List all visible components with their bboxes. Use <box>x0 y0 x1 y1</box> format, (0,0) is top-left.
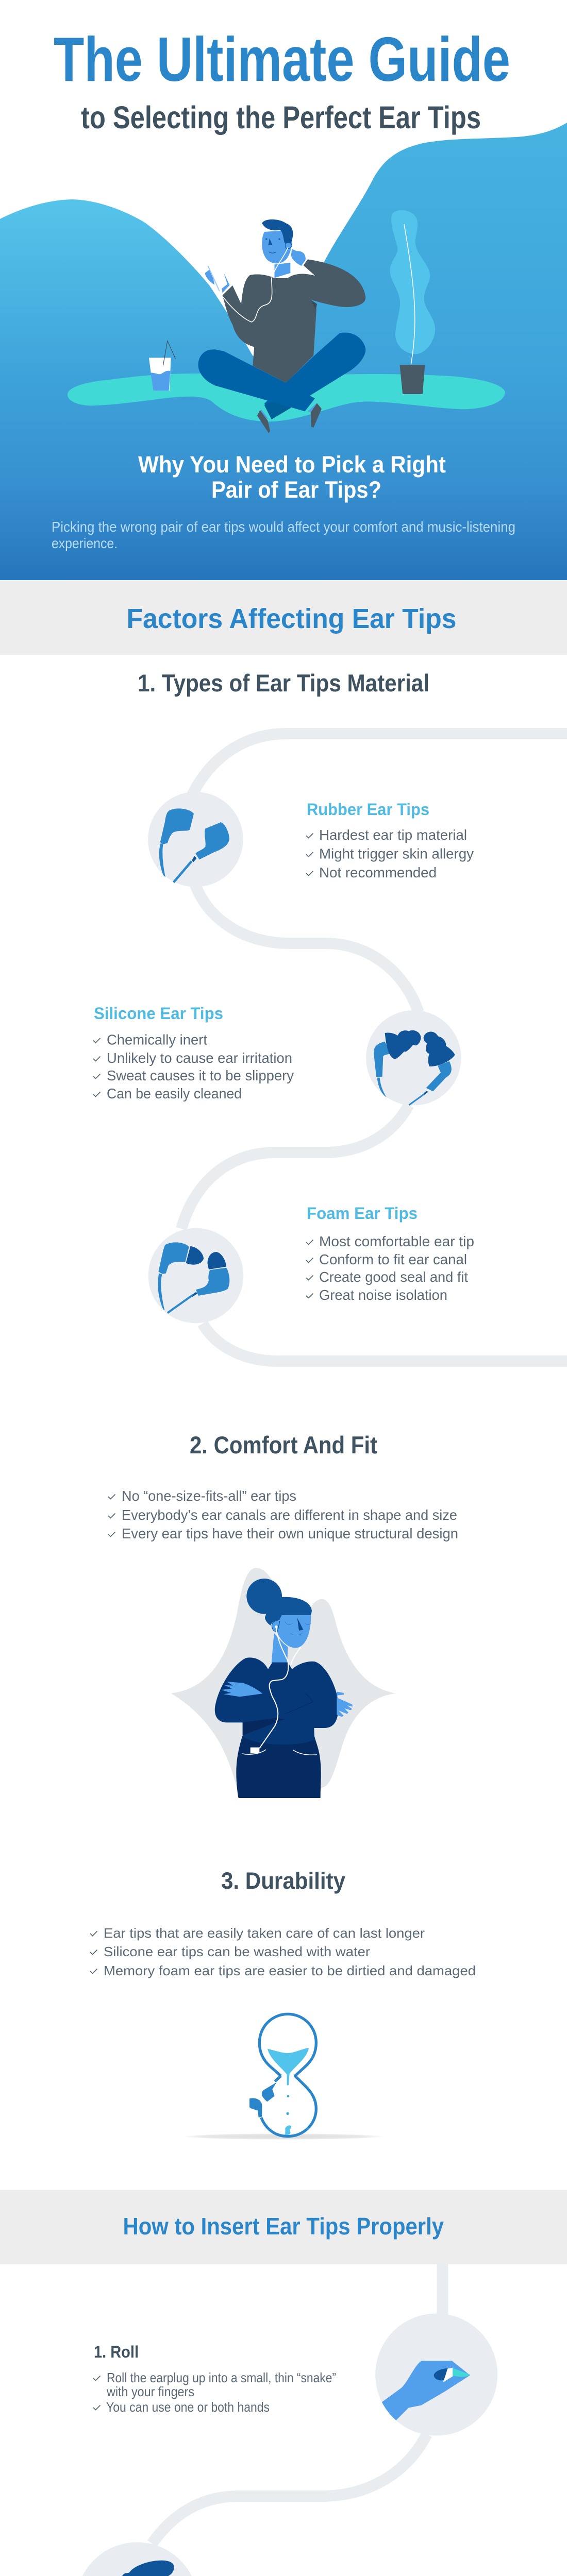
man: earphone cable <box>223 247 288 322</box>
ground blob <box>68 374 505 421</box>
list: comfort: No “one-size-fits-all” ear tips <box>122 1488 296 1504</box>
subtitle: to Selecting the Perfect Ear Tips <box>81 100 481 135</box>
heading: why pick: Why You Need to Pick a Right <box>138 451 446 478</box>
list: silicone <box>93 1031 294 1101</box>
heading: durability: 3. Durability <box>221 1868 345 1894</box>
man: sweater <box>222 259 365 383</box>
hourglass shadow <box>182 2133 384 2140</box>
man: head <box>262 219 293 278</box>
list: durability: Ear tips that are easily taken care of can last longer <box>104 1925 425 1941</box>
intro paragraph: experience. <box>52 535 118 551</box>
panel: foam ear tips <box>148 1204 474 1323</box>
list: roll: with your fingers <box>106 2384 194 2399</box>
path: material rail <box>181 734 567 1361</box>
heading: why pick <box>138 451 446 503</box>
panel: rubber ear tips <box>148 792 474 887</box>
list: comfort <box>108 1488 458 1541</box>
woman: earphone cable and player <box>242 1627 317 1755</box>
heading: types of material: 1. Types of Ear Tips Material <box>138 669 429 697</box>
woman: facial features <box>285 1618 311 1635</box>
list: silicone: Can be easily cleaned <box>107 1086 242 1101</box>
woman: hair <box>246 1579 312 1625</box>
earbud ends <box>262 2082 277 2102</box>
list: durability: Silicone ear tips can be washed with water <box>104 1944 370 1959</box>
woman: neck <box>272 1633 288 1663</box>
woman: left hand <box>222 1682 262 1697</box>
heading: how to insert: How to Insert Ear Tips Properly <box>123 2213 444 2240</box>
woman: trousers <box>236 1736 321 1798</box>
list: roll: Roll the earplug up into a small, thin “snake” <box>107 2370 336 2385</box>
icon: plant leaf <box>390 210 435 354</box>
intro paragraph <box>52 519 515 551</box>
heading: why pick: Pair of Ear Tips? <box>211 477 381 503</box>
list: roll <box>93 2370 336 2415</box>
list: comfort: Everybody’s ear canals are different in shape and size <box>122 1507 457 1523</box>
list: comfort: Every ear tips have their own unique structural design <box>122 1526 458 1541</box>
right hill background <box>258 123 567 580</box>
heading: comfort and fit: 2. Comfort And Fit <box>190 1431 377 1459</box>
plant stem <box>404 224 415 364</box>
woman: face <box>277 1615 311 1648</box>
icon: drink glass <box>149 341 176 391</box>
list: rubber <box>306 827 474 880</box>
list: foam <box>306 1233 474 1303</box>
list: silicone: Unlikely to cause ear irritation <box>107 1050 292 1066</box>
panel: hero <box>0 24 567 580</box>
icon: foam earbuds <box>148 1228 243 1323</box>
illustration: man listening with earphones <box>68 210 505 433</box>
man: underarm shade <box>311 300 317 310</box>
icon: hand rolling earplug <box>369 2313 497 2436</box>
woman: sleeve crease <box>285 1693 313 1714</box>
woman: right hand <box>337 1691 353 1717</box>
panel: silicone ear tips <box>93 1004 461 1106</box>
list: durability <box>90 1925 476 1978</box>
heading: factors: Factors Affecting Ear Tips <box>127 603 457 634</box>
heading: rubber: Rubber Ear Tips <box>307 800 429 819</box>
list: roll: You can use one or both hands <box>106 2399 270 2415</box>
icon: rubber earbuds <box>148 792 243 887</box>
list: silicone: Sweat causes it to be slippery <box>107 1067 294 1083</box>
woman: sweater shade <box>243 1718 285 1735</box>
man: hand at ear <box>291 249 306 266</box>
list: rubber: Not recommended <box>319 865 437 880</box>
illustration: woman with arms crossed <box>171 1568 396 1798</box>
hourglass sand <box>268 2048 309 2085</box>
panel: step 1 roll <box>93 2313 497 2436</box>
heading: silicone: Silicone Ear Tips <box>94 1004 223 1023</box>
list: silicone: Chemically inert <box>107 1031 207 1048</box>
panel: step 2 pull <box>82 2542 192 2576</box>
man: legs <box>198 333 365 433</box>
path: insert rail <box>135 2264 443 2576</box>
woman: ear and earbud <box>272 1621 280 1632</box>
list: durability: Memory foam ear tips are easier to be dirtied and damaged <box>104 1963 476 1978</box>
woman backdrop <box>171 1568 396 1788</box>
list: rubber: Might trigger skin allergy <box>319 846 474 861</box>
panel: how to insert band <box>0 2190 567 2264</box>
icon: plant pot <box>399 365 425 394</box>
hourglass outline <box>259 2014 316 2137</box>
heading: foam: Foam Ear Tips <box>307 1204 418 1223</box>
left hill background <box>0 199 361 580</box>
list: foam: Create good seal and fit <box>319 1269 468 1285</box>
icon: head with finger at ear <box>82 2542 192 2576</box>
panel: factors heading band <box>0 580 567 655</box>
icon: hourglass with earbud <box>182 2014 384 2140</box>
man: left hand and phone <box>205 266 229 293</box>
list: foam: Most comfortable ear tip <box>319 1233 474 1249</box>
list: foam: Conform to fit ear canal <box>319 1251 467 1267</box>
list: foam: Great noise isolation <box>319 1287 447 1303</box>
intro paragraph: Picking the wrong pair of ear tips would affect your comfort and music-listening <box>52 519 515 535</box>
list: rubber: Hardest ear tip material <box>319 827 467 843</box>
heading: roll: 1. Roll <box>94 2343 139 2361</box>
icon: silicone earbuds <box>366 1010 461 1106</box>
woman: sweater <box>215 1657 338 1744</box>
